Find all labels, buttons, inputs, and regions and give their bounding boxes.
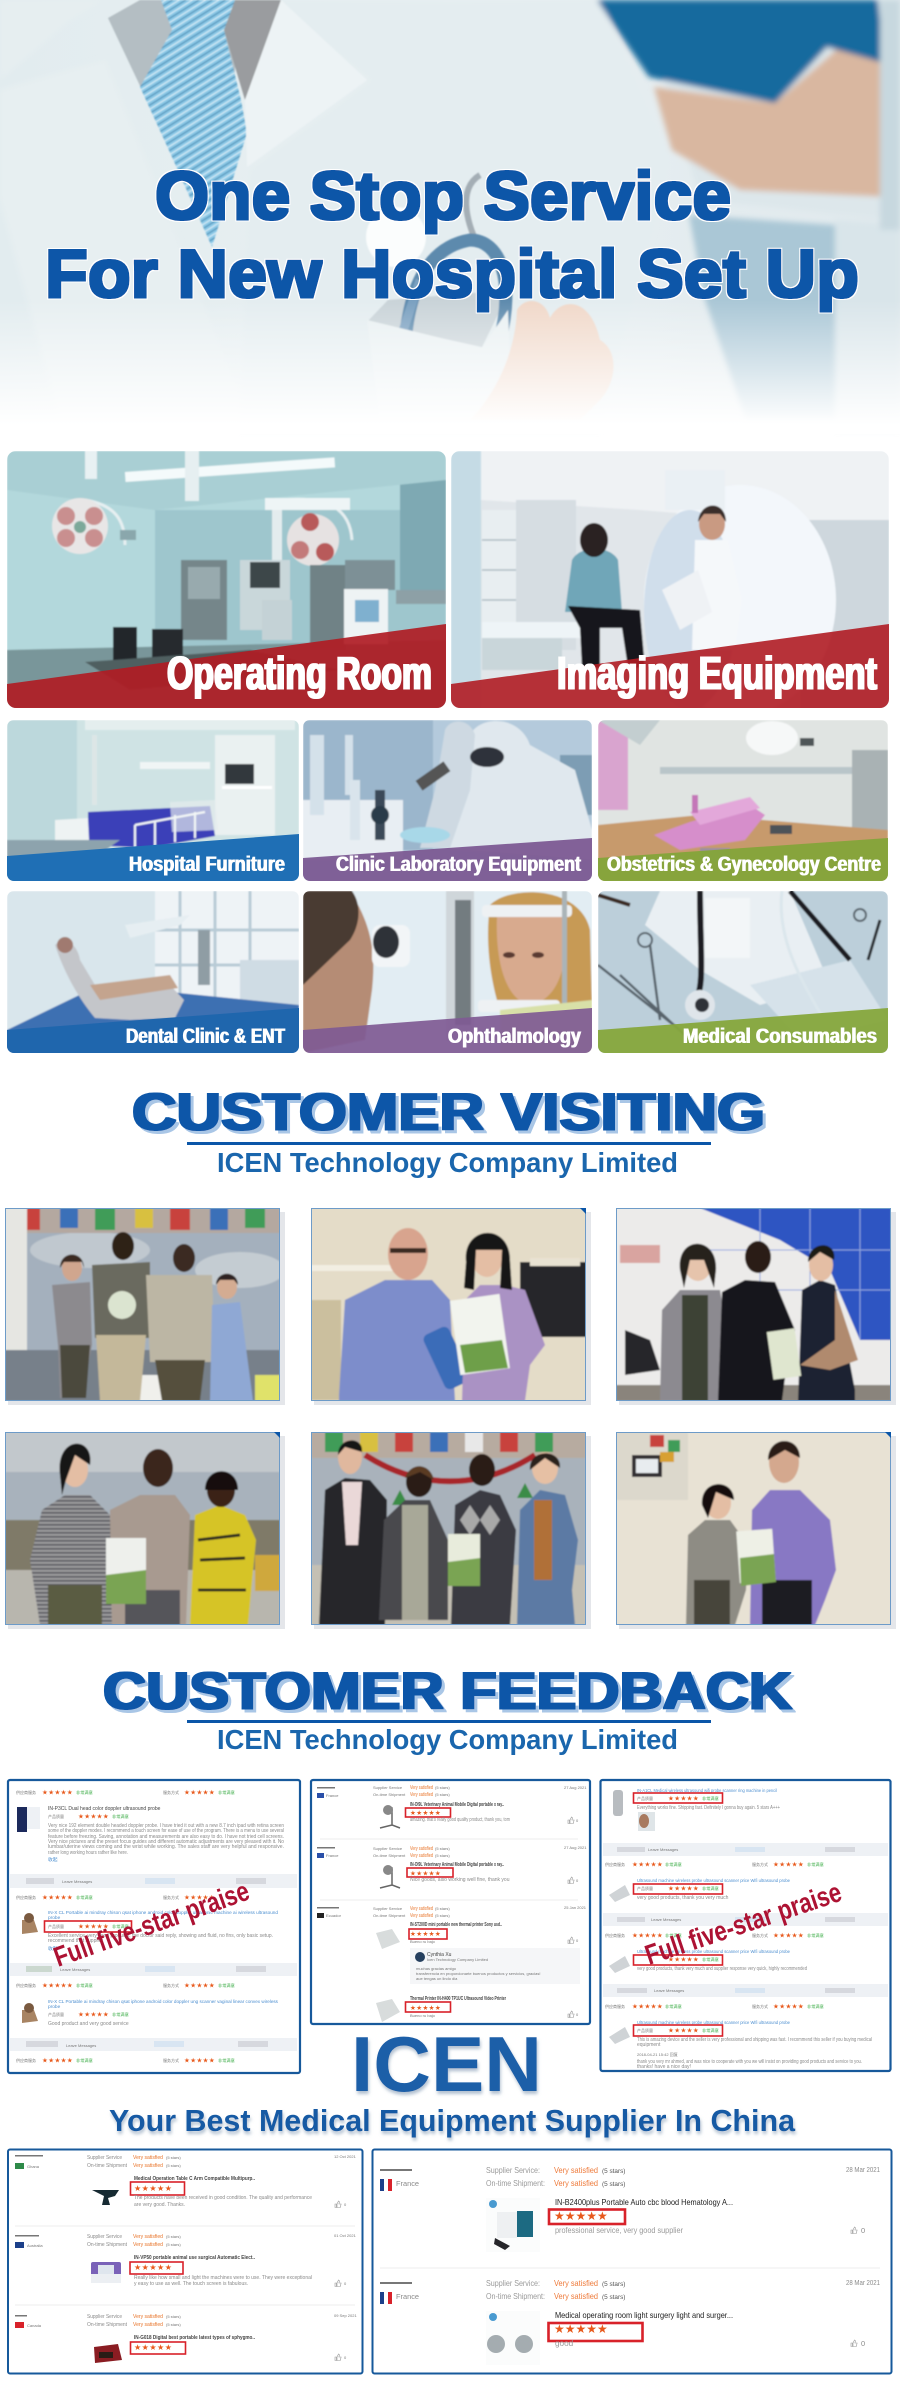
review list: 产品质量 [637, 1885, 653, 1891]
review list: ★★★★★ [410, 2004, 441, 2012]
title: For New Hospital Set Up [45, 236, 859, 312]
red band [7, 624, 446, 708]
review list: 非常满意 [112, 1813, 129, 1820]
review list: 服务方式 [752, 1861, 768, 1867]
review list: probe [48, 2004, 61, 2010]
review list [10, 1788, 297, 2064]
review list: 非常满意 [807, 2003, 824, 2010]
review list: very good products, thank very much and supplier response very quick, highly recommended [637, 1966, 807, 1972]
label: Clinic Laboratory Equipment [336, 853, 581, 876]
review list: IN-OI9L Veterinary Animal Mobile Digital portable x ray.. [410, 1802, 504, 1808]
panel: operating room [7, 451, 446, 708]
review list: 服务方式 [752, 2003, 768, 2009]
review: digital sphygmomanometer: (5 stars) [166, 2322, 181, 2327]
review: hematology analyser: 0 [861, 2226, 865, 2235]
review list: IN-ST200D mini portable new thermal printer Sony usd.. [410, 1922, 502, 1928]
review list: 非常满意 [218, 2057, 235, 2064]
panel: hospital furniture [7, 720, 299, 881]
review list: Leave Messages [60, 1967, 90, 1972]
review list: ★★★★★ [78, 2010, 109, 2018]
review list: (5 stars) [435, 1792, 450, 1797]
review list: 服务方式 [163, 1982, 179, 1988]
review list: 供应商服务 [16, 1982, 36, 1988]
review: digital sphygmomanometer: IN-G018 Digital best portable latest types of sphygmo.. [134, 2335, 256, 2341]
photo: operating room [7, 451, 446, 708]
photo: visit four, three people with catalogue [5, 1432, 285, 1629]
review list: ★★★★★ [773, 2002, 804, 2010]
review list: Icen Technology Company Limited [427, 1957, 488, 1962]
review list: IN-OI9L Veterinary Animal Mobile Digital portable x ray.. [410, 1862, 504, 1868]
review: digital sphygmomanometer: (5 stars) [166, 2314, 181, 2319]
review list: Leave Messages [654, 1988, 684, 1993]
review list: Bueno ru bajo [410, 1939, 436, 1944]
review: hematology analyser: ★★★★★ [554, 2209, 608, 2223]
review list: France [326, 1793, 339, 1798]
review list: IN-P3CL Dual head color doppler ultrasound probe [48, 1806, 161, 1812]
review list: 非常满意 [76, 1894, 93, 1901]
review list: ★★★★★ [632, 2002, 663, 2010]
review: portable animal surgical unit: IN-VP50 portable animal use surgical Automatic Elect.. [134, 2255, 256, 2261]
review: operating room light: ★★★★★ [554, 2322, 608, 2336]
review: hematology analyser: Supplier Service: [486, 2166, 540, 2175]
heading text: CUSTOMER VISITING [132, 1083, 765, 1142]
callout: full five-star praise: Full five-star praise [50, 1875, 253, 1973]
review list: Leave Messages [648, 1847, 678, 1852]
review list: aue tengas un lindo dia [416, 1976, 458, 1981]
review list: Good product and very good service [48, 2021, 129, 2027]
review list: ★★★★★ [78, 1922, 109, 1930]
review: portable animal surgical unit: ★★★★★ [134, 2263, 172, 2272]
panel: clinic laboratory equipment [303, 720, 592, 881]
review: digital sphygmomanometer: Supplier Service [87, 2314, 122, 2320]
review list: Nice goods, also working well fine, thank you [410, 1877, 510, 1883]
panel: ophthalmology [303, 891, 592, 1053]
review list: ★★★★★ [42, 1894, 73, 1902]
review: portable animal surgical unit: y easy to use as well. The touch screen is fabulous. [134, 2281, 248, 2287]
review list: 非常满意 [702, 1956, 719, 1963]
review: medical operation table: are very good. Thanks. [134, 2202, 185, 2208]
review: portable animal surgical unit: Supplier Service [87, 2234, 122, 2240]
review: operating room light: Very satisfied [554, 2292, 598, 2301]
review list: On-time Shipment [373, 1792, 406, 1797]
review list: ★★★★★ [42, 1982, 73, 1990]
review list: ★★★★★ [184, 1788, 215, 1796]
review list: ★★★★★ [668, 2026, 699, 2034]
review list: Supplier Service [373, 1846, 403, 1851]
review list: IN-X CL Portable ai mindray chison qsat iphone android color doppler ung scanner vaginal linear convex wireless [48, 1999, 279, 2005]
review list: 产品质量 [48, 1923, 64, 1929]
review list: 产品质量 [48, 2011, 64, 2017]
panel frame [8, 2150, 362, 2374]
review list: 供应商服务 [605, 1932, 625, 1938]
panel frame [311, 1780, 590, 2024]
review list [15, 2154, 357, 2363]
review: digital sphygmomanometer: On-time Shipment [87, 2322, 128, 2328]
panel frame [600, 1780, 890, 2071]
icon: stethoscope and pocket [366, 175, 512, 420]
review list: (5 stars) [435, 1906, 450, 1911]
review: hematology analyser: IN-B2400plus Portable Auto cbc blood Hematology A... [555, 2198, 733, 2207]
review list: 非常满意 [76, 2057, 93, 2064]
review list: Very nice 192 element double headed doppler probe. I have tried it out with a new 8.7 inch ipad with retina screen [48, 1823, 284, 1829]
review list: ★★★★★ [42, 2056, 73, 2064]
review list: 非常满意 [665, 2003, 682, 2010]
review list: Supplier Service [373, 1785, 403, 1790]
review list: Ultrasound machine wireless probe ultrasound scanner price Wifi ultrasound probe [637, 1878, 790, 1884]
hero photo: doctor in white coat [0, 0, 900, 434]
review list: thanks! have a nice day! [637, 2064, 691, 2070]
review list: very good products, thank you very much [637, 1895, 729, 1901]
review: operating room light: Medical operating room light surgery light and surger... [555, 2311, 733, 2320]
review: portable animal surgical unit: (5 stars) [166, 2234, 181, 2239]
review list: ★★★★★ [668, 1884, 699, 1892]
review list: Thermal Printer IN-H400 TP1UC Ultrasound Video Printer [410, 1996, 506, 2002]
review: portable animal surgical unit [15, 2233, 357, 2287]
review: digital sphygmomanometer: 09 Sep 2021 [334, 2313, 357, 2318]
panel: feedback screenshot centre [311, 1780, 590, 2024]
review: medical operation table: 12 Oct 2021 [334, 2154, 357, 2159]
review: hematology analyser: Very satisfied [554, 2179, 598, 2188]
review: operating room light: 28 Mar 2021 [846, 2278, 880, 2287]
review: digital sphygmomanometer: ★★★★★ [134, 2343, 172, 2352]
review list: ★★★★★ [410, 1930, 441, 1938]
hero banner [0, 0, 900, 434]
review: operating room light: France [396, 2292, 419, 2301]
photo: dental chair [7, 891, 299, 1053]
review list: 非常满意 [665, 1861, 682, 1868]
brand logo: ICEN: ICEN [351, 2020, 542, 2108]
review list: 收起 [48, 1945, 58, 1952]
review: portable animal surgical unit: 0 [344, 2281, 347, 2286]
review list: Ecuador [326, 1913, 342, 1918]
review list: ★★★★★ [410, 1870, 441, 1878]
panel: feedback screenshot left [8, 1780, 300, 2073]
review: operating room light: good [555, 2339, 574, 2348]
review list: 27 Aug 2021 [564, 1845, 587, 1850]
review: medical operation table: 0 [344, 2202, 347, 2207]
review list: Ultrasound machine wireless probe ultrasound scanner price Wifi ultrasound probe [637, 1949, 790, 1955]
review list: 0 [576, 1878, 579, 1883]
review list: 产品质量 [637, 1795, 653, 1801]
review list: (5 stars) [435, 1853, 450, 1858]
review: medical operation table [15, 2154, 357, 2208]
review: operating room light: On-time Shipment: [486, 2292, 545, 2301]
photo: gynecology room [598, 720, 888, 881]
panel: dental clinic and ENT [7, 891, 299, 1053]
review: medical operation table: On-time Shipment [87, 2163, 128, 2169]
heading: customer feedback [103, 1662, 792, 1755]
review: medical operation table: (5 stars) [166, 2163, 181, 2168]
label: Dental Clinic & ENT [126, 1025, 285, 1048]
red band [451, 624, 889, 708]
review: digital sphygmomanometer: Very satisfied [133, 2314, 163, 2320]
review list: 2018-04-21 15:42 回复 [637, 2051, 678, 2057]
photo: visit one, four people with flags [5, 1208, 285, 1405]
review list: Very satisfied [410, 1785, 433, 1791]
review list: 服务方式 [163, 1894, 179, 1900]
review: medical operation table: Very satisfied [133, 2163, 163, 2169]
panel frame [372, 2150, 892, 2374]
review: portable animal surgical unit: Australia [27, 2243, 43, 2248]
heading text: CUSTOMER FEEDBACK [103, 1662, 792, 1721]
review list: transferencia en proporcionarte buenos productos y servicios, gracias! [416, 1971, 541, 1976]
review: hematology analyser: professional service, very good supplier [555, 2226, 683, 2235]
review list: Very nice pictures and the preset focus guides and different automatic adjustments are very pleased with it. No [48, 1839, 284, 1845]
review list: 非常满意 [807, 1861, 824, 1868]
review list: France [326, 1853, 339, 1858]
review list: Very satisfied [410, 1913, 433, 1919]
title: One Stop Service [155, 158, 731, 234]
review list: 非常满意 [76, 1789, 93, 1796]
review list: ★★★★★ [78, 1812, 109, 1820]
review list: lumbar/uterine views coming and the wrist while working. The sales staff are very helpful and responsive. [48, 1844, 284, 1850]
photo: visit two, man and woman with catalogue [311, 1208, 591, 1405]
review list: ★★★★★ [410, 1809, 441, 1817]
panel: medical consumables [598, 891, 888, 1053]
review list: (5 stars) [435, 1785, 450, 1790]
rule [187, 1720, 711, 1723]
review list: 非常满意 [807, 1932, 824, 1939]
panel: feedback bottom left [8, 2150, 362, 2374]
review: portable animal surgical unit: On-time Shipment [87, 2242, 128, 2248]
review: hematology analyser: (5 stars) [602, 2181, 625, 2188]
photo: MRI scanner [451, 451, 889, 715]
review: digital sphygmomanometer: Very satisfied [133, 2322, 163, 2328]
photo: eye examination [303, 891, 592, 1053]
purple band [303, 1008, 592, 1053]
review list: some of the doppler modes. I recommend a touch screen for ease of use of the program. There is a menu to use several [48, 1828, 284, 1834]
review list: (5 stars) [435, 1913, 450, 1918]
callout: full five-star praise: Full five-star praise [641, 1876, 845, 1971]
review list: Very satisfied [410, 1792, 433, 1798]
review list: Leave Messages [66, 2043, 96, 2048]
review list: ★★★★★ [773, 1860, 804, 1868]
review list: 供应商服务 [605, 1861, 625, 1867]
photo: visit three, handshake in front of map [616, 1208, 896, 1405]
review list: 0 [576, 1938, 579, 1943]
review list: 25 Jan 2021 [564, 1905, 587, 1910]
review: portable animal surgical unit: Really like how small and light the machines were to use. They were exceptional [134, 2275, 312, 2281]
review list: 0 [576, 2012, 579, 2017]
review list: Leave Messages [651, 1917, 681, 1922]
review list: IN-X CL Portable ai mindray chison qsat iphone android color doppler ultrasonic machine ai wireless ultrasound [48, 1910, 278, 1916]
review list: 0 [576, 1818, 579, 1823]
review list: (5 stars) [435, 1846, 450, 1851]
review list: probe [48, 1915, 61, 1921]
review list: Ultrasound machine wireless probe ultrasound scanner price Wifi ultrasound probe [637, 2020, 790, 2026]
review: hematology analyser: (5 stars) [602, 2168, 625, 2175]
review list: 非常满意 [702, 1885, 719, 1892]
review list: ★★★★★ [184, 1982, 215, 1990]
review list: 供应商服务 [16, 1894, 36, 1900]
review: hematology analyser: Very satisfied [554, 2166, 598, 2175]
title [45, 158, 859, 312]
review: digital sphygmomanometer [15, 2313, 357, 2363]
review list: amazing. that's really good quality product, thank you, tom [410, 1817, 510, 1823]
review list: ★★★★★ [42, 1788, 73, 1796]
review list: 产品质量 [48, 1813, 64, 1819]
review: medical operation table: Ghana [27, 2164, 40, 2169]
review list [603, 1788, 888, 2070]
photo: visit five, Merry Christmas group [311, 1432, 591, 1629]
purple band [303, 838, 592, 881]
photo: lab technicians [303, 720, 592, 881]
review list: 收起 [48, 1856, 58, 1863]
review list [317, 1785, 587, 2022]
hand [470, 301, 614, 420]
review list: Excellent service, very good products, the doctor said reply, showing and fluid, no fins, only basic setup. [48, 1933, 273, 1939]
panel: imaging equipment [451, 451, 889, 715]
review list: 非常满意 [112, 2011, 129, 2018]
review list: 供应商服务 [16, 1789, 36, 1795]
review: medical operation table: Very satisfied [133, 2155, 163, 2161]
review list: 27 Aug 2021 [564, 1785, 587, 1790]
photo: ward bed [7, 720, 299, 881]
label: Operating Room [167, 647, 432, 699]
review list: Supplier Service [373, 1906, 403, 1911]
review: medical operation table: The products have been received in good condition. The quality and performance [134, 2195, 312, 2201]
review list: Leave Messages [62, 1879, 92, 1884]
review list: Everything works fine. Shipping fast. Definitely I gonna buy again. 5 stars A+++ [637, 1805, 780, 1811]
label: Medical Consumables [683, 1025, 877, 1048]
green band [598, 1008, 888, 1053]
review: portable animal surgical unit: Very satisfied [133, 2242, 163, 2248]
review: hematology analyser: France [396, 2179, 419, 2188]
review list: 非常满意 [218, 1982, 235, 1989]
label: Ophthalmology [448, 1025, 581, 1048]
review list: On-time Shipment [373, 1913, 406, 1918]
panel: feedback screenshot right [600, 1780, 890, 2071]
review: digital sphygmomanometer: 0 [344, 2355, 347, 2360]
review list: Cynthia Xu [427, 1952, 452, 1958]
photo: instruments and stethoscope [598, 891, 888, 1053]
review list: muchas gracias amigo [416, 1966, 457, 1971]
review list: ★★★★★ [773, 1932, 804, 1940]
review: operating room light: Supplier Service: [486, 2279, 540, 2288]
review list: IN-A1CL Medical wireless ultrasound wifi probe scanner ring machine in pencil [637, 1788, 777, 1794]
blue band [7, 834, 299, 881]
review list: 非常满意 [665, 1932, 682, 1939]
photo: visit six, man and woman by white wall [616, 1432, 896, 1629]
panel: obstetrics and gynecology centre [598, 720, 888, 881]
review: medical operation table: Medical Operation Table C Arm Compatible Multipurp.. [134, 2176, 256, 2182]
review: medical operation table: Supplier Service [87, 2155, 122, 2161]
review: digital sphygmomanometer: Canada [27, 2323, 42, 2328]
review list: ★★★★★ [668, 1956, 699, 1964]
tagline: Your Best Medical Equipment Supplier In China [109, 2103, 796, 2138]
review list: ★★★★★ [184, 1894, 215, 1902]
review list: rather long working hours rather like here. [48, 1850, 128, 1856]
review list: recommend that supplier [48, 1938, 103, 1944]
review: operating room light [380, 2278, 880, 2365]
review list: Bueno ru bajo [410, 2013, 436, 2018]
review list: feature before freezing. Saving, annotation and measurements are also easy to do. I have not tried cell screens. [48, 1834, 284, 1840]
review: portable animal surgical unit: (5 stars) [166, 2242, 181, 2247]
review list: On-time Shipment [373, 1853, 406, 1858]
review list: 非常满意 [112, 1923, 129, 1930]
company name: ICEN Technology Company Limited [217, 1147, 678, 1178]
review list: 服务方式 [163, 1789, 179, 1795]
review list: ★★★★★ [668, 1794, 699, 1802]
panel: feedback bottom right [372, 2150, 892, 2374]
review: hematology analyser: On-time Shipment: [486, 2179, 545, 2188]
review: operating room light: (5 stars) [602, 2281, 625, 2288]
company name: ICEN Technology Company Limited [217, 1724, 678, 1755]
review: operating room light: Very satisfied [554, 2279, 598, 2288]
review list: 非常满意 [702, 1795, 719, 1802]
review list: 非常满意 [76, 1982, 93, 1989]
panel frame [8, 1780, 300, 2073]
green band [598, 838, 888, 881]
review list: 非常满意 [702, 2027, 719, 2034]
review: medical operation table: ★★★★★ [134, 2184, 172, 2193]
review list: 非常满意 [218, 1789, 235, 1796]
review list: 供应商服务 [16, 2057, 36, 2063]
label: Hospital Furniture [129, 853, 285, 876]
review list: 供应商服务 [605, 2003, 625, 2009]
review list: ★★★★★ [632, 1932, 663, 1940]
review: hematology analyser [380, 2165, 880, 2252]
review: operating room light: 0 [861, 2339, 865, 2348]
review: medical operation table: (5 stars) [166, 2155, 181, 2160]
review: portable animal surgical unit: Very satisfied [133, 2234, 163, 2240]
rule [187, 1142, 711, 1145]
review: hematology analyser: 28 Mar 2021 [846, 2165, 880, 2174]
heading: customer visiting [132, 1083, 765, 1178]
review list: ★★★★★ [184, 2056, 215, 2064]
review: operating room light: (5 stars) [602, 2294, 625, 2301]
blue band [7, 1008, 299, 1053]
review: portable animal surgical unit: 01 Oct 2021 [334, 2233, 357, 2238]
review list: Very satisfied [410, 1853, 433, 1859]
review list: 服务方式 [752, 1932, 768, 1938]
review list: ★★★★★ [632, 1860, 663, 1868]
review list: equipment [637, 2042, 661, 2048]
review list: Very satisfied [410, 1906, 433, 1912]
review list: Very satisfied [410, 1846, 433, 1852]
review list: 产品质量 [637, 2027, 653, 2033]
review list: 服务方式 [163, 2057, 179, 2063]
